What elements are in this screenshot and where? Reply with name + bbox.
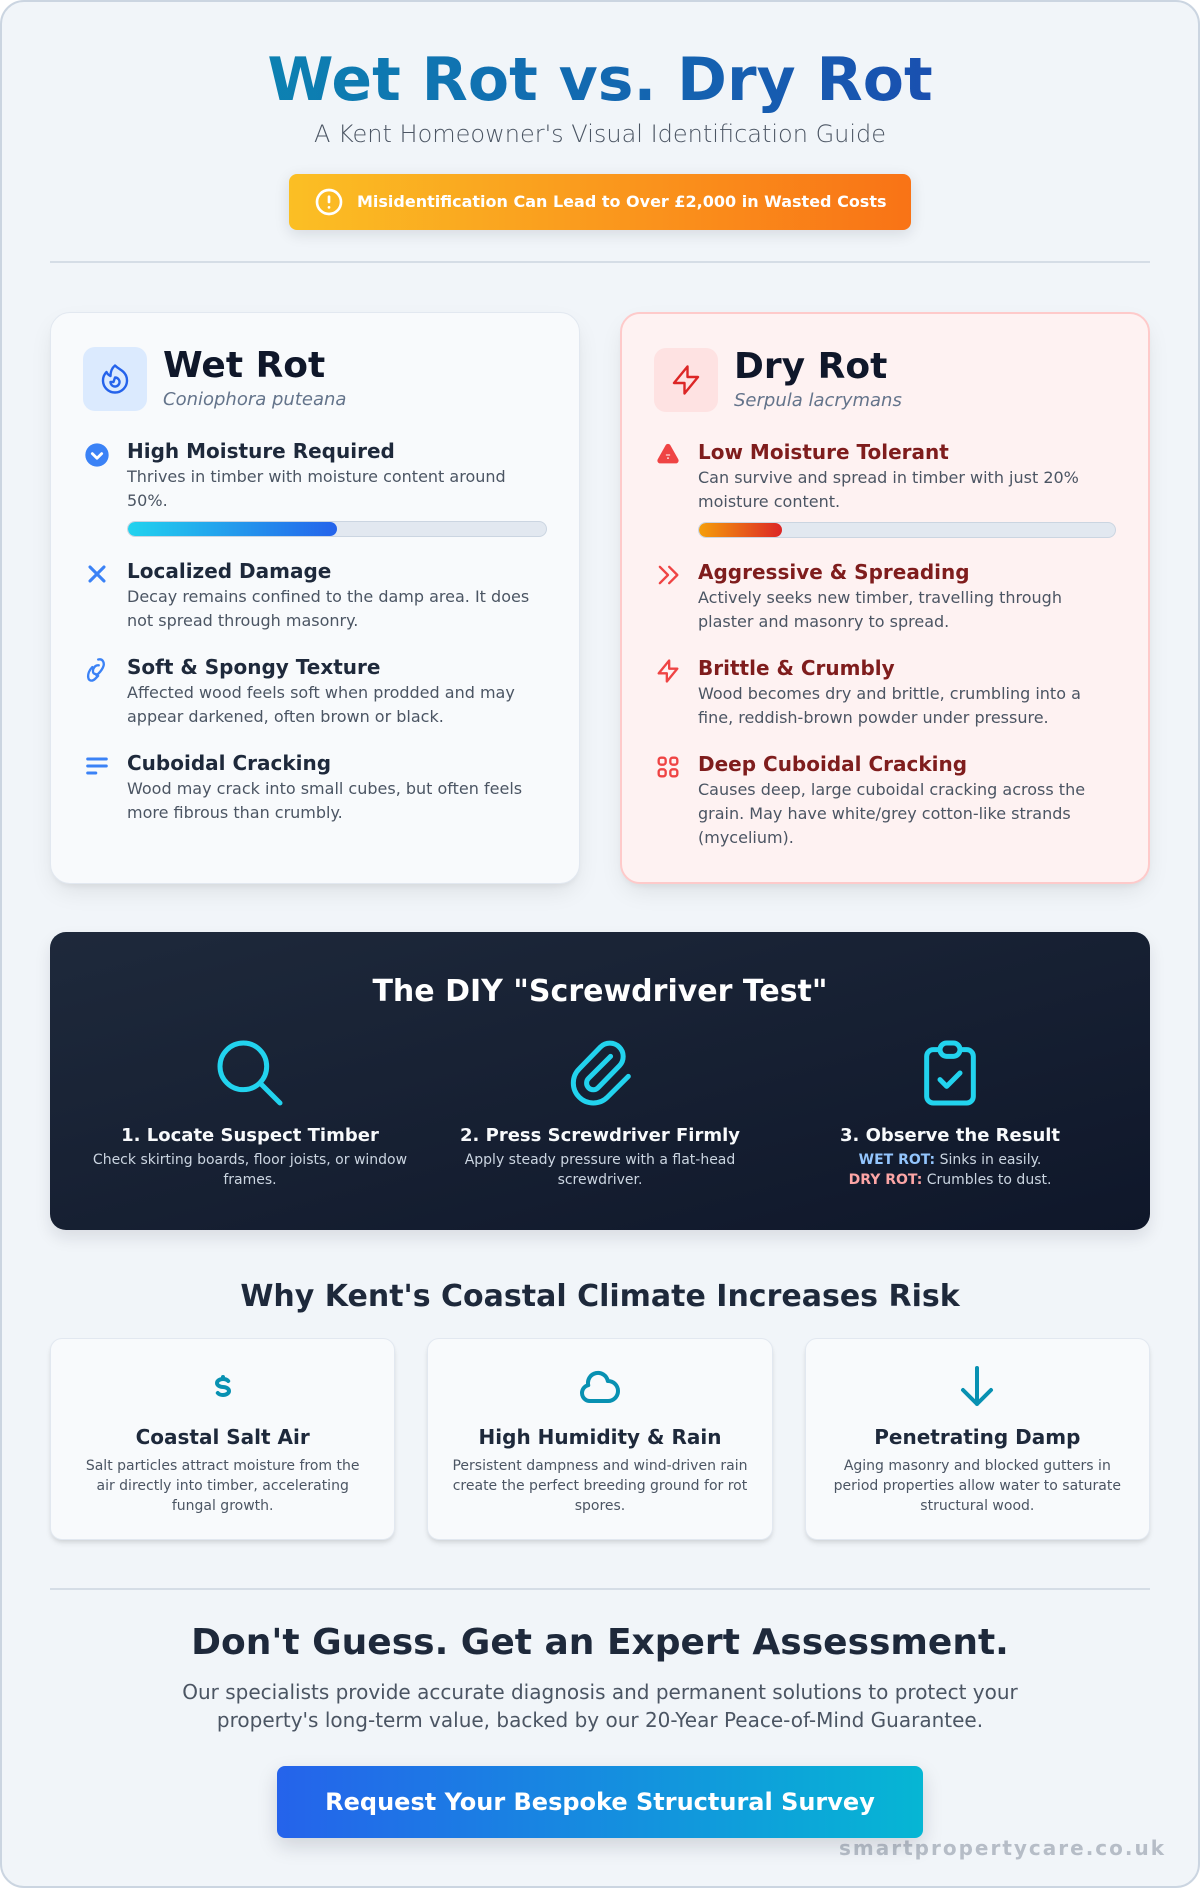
item: deep cuboidal cracking: (mycelium). <box>698 828 794 847</box>
step title: 3. Observe the Result <box>840 1125 1060 1146</box>
item: low moisture: Can survive and spread in timber with just 20% <box>698 468 1079 487</box>
card: coastal salt air <box>50 1338 395 1540</box>
heading: dry rot: Dry Rot <box>734 346 887 387</box>
step description: Check skirting boards, floor joists, or window <box>93 1152 407 1168</box>
card description: fungal growth. <box>172 1498 273 1514</box>
icon: clipboard check <box>924 1040 976 1106</box>
card description: spores. <box>575 1498 625 1514</box>
item: cuboidal cracking: Wood may crack into small cubes, but often feels <box>127 779 522 798</box>
item: localized damage: Localized Damage <box>127 559 331 583</box>
item: brittle: Wood becomes dry and brittle, crumbling into a <box>698 684 1081 703</box>
step title: 1. Locate Suspect Timber <box>121 1125 379 1146</box>
icon: flame <box>83 347 147 411</box>
warning banner <box>289 174 911 230</box>
icon: chevron circle <box>85 443 109 467</box>
card title: Penetrating Damp <box>874 1425 1080 1449</box>
icon: cloud <box>580 1370 620 1403</box>
step 2 <box>460 1040 740 1188</box>
icon: paperclip <box>570 1040 631 1106</box>
panel: wet rot <box>50 312 580 884</box>
heading: call to action: Don't Guess. Get an Expert Assessment. <box>191 1622 1009 1663</box>
item: localized damage <box>127 559 529 630</box>
item: low moisture: moisture content. <box>698 492 840 511</box>
heading: coastal climate: Why Kent's Coastal Climate Increases Risk <box>240 1279 960 1314</box>
item: aggressive spreading <box>698 560 1062 631</box>
item: cuboidal cracking <box>127 751 522 822</box>
card description: create the perfect breeding ground for rot <box>453 1478 747 1494</box>
call to action text <box>182 1680 1018 1732</box>
item: brittle: fine, reddish-brown powder under pressure. <box>698 708 1049 727</box>
step description <box>93 1152 407 1188</box>
item: deep cuboidal cracking: grain. May have white/grey cotton-like strands <box>698 804 1071 823</box>
item: localized damage: Decay remains confined to the damp area. It does <box>127 587 529 606</box>
species name: Serpula lacrymans <box>734 390 902 411</box>
icon: lightning <box>654 348 718 412</box>
call to action text: property's long-term value, backed by our 20-Year Peace-of-Mind Guarantee. <box>217 1708 983 1732</box>
item: soft texture: Affected wood feels soft when prodded and may <box>127 683 515 702</box>
icon: chain link <box>86 658 105 682</box>
item: soft texture: appear darkened, often brown or black. <box>127 707 444 726</box>
item: high moisture <box>126 439 506 510</box>
step 3 <box>840 1040 1060 1188</box>
card description <box>834 1458 1121 1514</box>
subtitle: A Kent Homeowner's Visual Identification Guide <box>314 120 886 148</box>
step description: WET ROT: Sinks in easily. <box>859 1152 1041 1168</box>
button: request survey: Request Your Bespoke Structural Survey <box>325 1788 875 1816</box>
step description <box>464 1152 735 1188</box>
card description: Persistent dampness and wind-driven rain <box>452 1458 748 1474</box>
card description <box>452 1458 748 1514</box>
icon: magnifier <box>218 1040 282 1106</box>
moisture bar 20% <box>698 522 1116 538</box>
item: high moisture: Thrives in timber with moisture content around <box>127 467 506 486</box>
item: aggressive spreading: plaster and masonry to spread. <box>698 612 949 631</box>
item: aggressive spreading: Actively seeks new timber, travelling through <box>698 588 1062 607</box>
panel: screwdriver test <box>50 932 1150 1230</box>
button: request survey <box>277 1766 923 1838</box>
item: deep cuboidal cracking <box>698 752 1085 847</box>
icon: arrow down <box>960 1366 994 1406</box>
item: deep cuboidal cracking: Deep Cuboidal Cracking <box>698 752 967 776</box>
item: soft texture: Soft & Spongy Texture <box>127 655 380 679</box>
item: brittle <box>698 656 1081 727</box>
card: penetrating damp <box>805 1338 1150 1540</box>
step description <box>849 1152 1051 1188</box>
card description: period properties allow water to saturate <box>834 1478 1121 1494</box>
icon: dollar <box>215 1375 231 1397</box>
item: high moisture: High Moisture Required <box>127 439 395 463</box>
step 1 <box>93 1040 407 1188</box>
item: cuboidal cracking: Cuboidal Cracking <box>127 751 331 775</box>
card description: structural wood. <box>920 1498 1034 1514</box>
step description: DRY ROT: Crumbles to dust. <box>849 1172 1051 1188</box>
species name: Coniophora puteana <box>163 389 346 410</box>
card description: Salt particles attract moisture from the <box>86 1458 359 1474</box>
heading: wet rot: Wet Rot <box>163 345 325 386</box>
icon: warning circle <box>316 188 342 216</box>
item: low moisture: Low Moisture Tolerant <box>698 440 949 464</box>
step description: screwdriver. <box>558 1172 642 1188</box>
call to action text: Our specialists provide accurate diagnosis and permanent solutions to protect your <box>182 1680 1018 1704</box>
panel: dry rot <box>620 312 1150 884</box>
card description <box>86 1458 359 1514</box>
step title: 2. Press Screwdriver Firmly <box>460 1125 740 1146</box>
icon: warning triangle <box>657 444 679 464</box>
item: localized damage: not spread through masonry. <box>127 611 358 630</box>
icon: double chevron <box>658 566 678 584</box>
step description: Apply steady pressure with a flat-head <box>465 1152 735 1168</box>
icon: lightning small <box>658 659 678 683</box>
icon: cross <box>88 565 106 583</box>
card title: Coastal Salt Air <box>136 1425 310 1449</box>
item: high moisture: 50%. <box>127 491 168 510</box>
heading: screwdriver test: The DIY "Screwdriver Test" <box>372 974 828 1009</box>
item: brittle: Brittle & Crumbly <box>698 656 895 680</box>
item: deep cuboidal cracking: Causes deep, large cuboidal cracking across the <box>698 780 1085 799</box>
card description: Aging masonry and blocked gutters in <box>844 1458 1111 1474</box>
item: cuboidal cracking: more fibrous than crumbly. <box>127 803 343 822</box>
moisture bar 50% <box>127 521 547 537</box>
banner text: Misidentification Can Lead to Over £2,000 in Wasted Costs <box>357 192 886 211</box>
title: Wet Rot vs. Dry Rot <box>267 45 933 115</box>
card description: air directly into timber, accelerating <box>96 1478 349 1494</box>
icon: grid <box>658 756 678 778</box>
item: soft texture <box>127 655 515 726</box>
title <box>50 44 1150 116</box>
watermark: smartpropertycare.co.uk <box>839 1836 1166 1860</box>
item: aggressive spreading: Aggressive & Spreading <box>698 560 970 584</box>
card: humidity and rain <box>427 1338 773 1540</box>
card title: High Humidity & Rain <box>479 1425 721 1449</box>
icon: lines <box>86 758 108 774</box>
item: low moisture <box>698 440 1079 511</box>
step description: frames. <box>223 1172 277 1188</box>
